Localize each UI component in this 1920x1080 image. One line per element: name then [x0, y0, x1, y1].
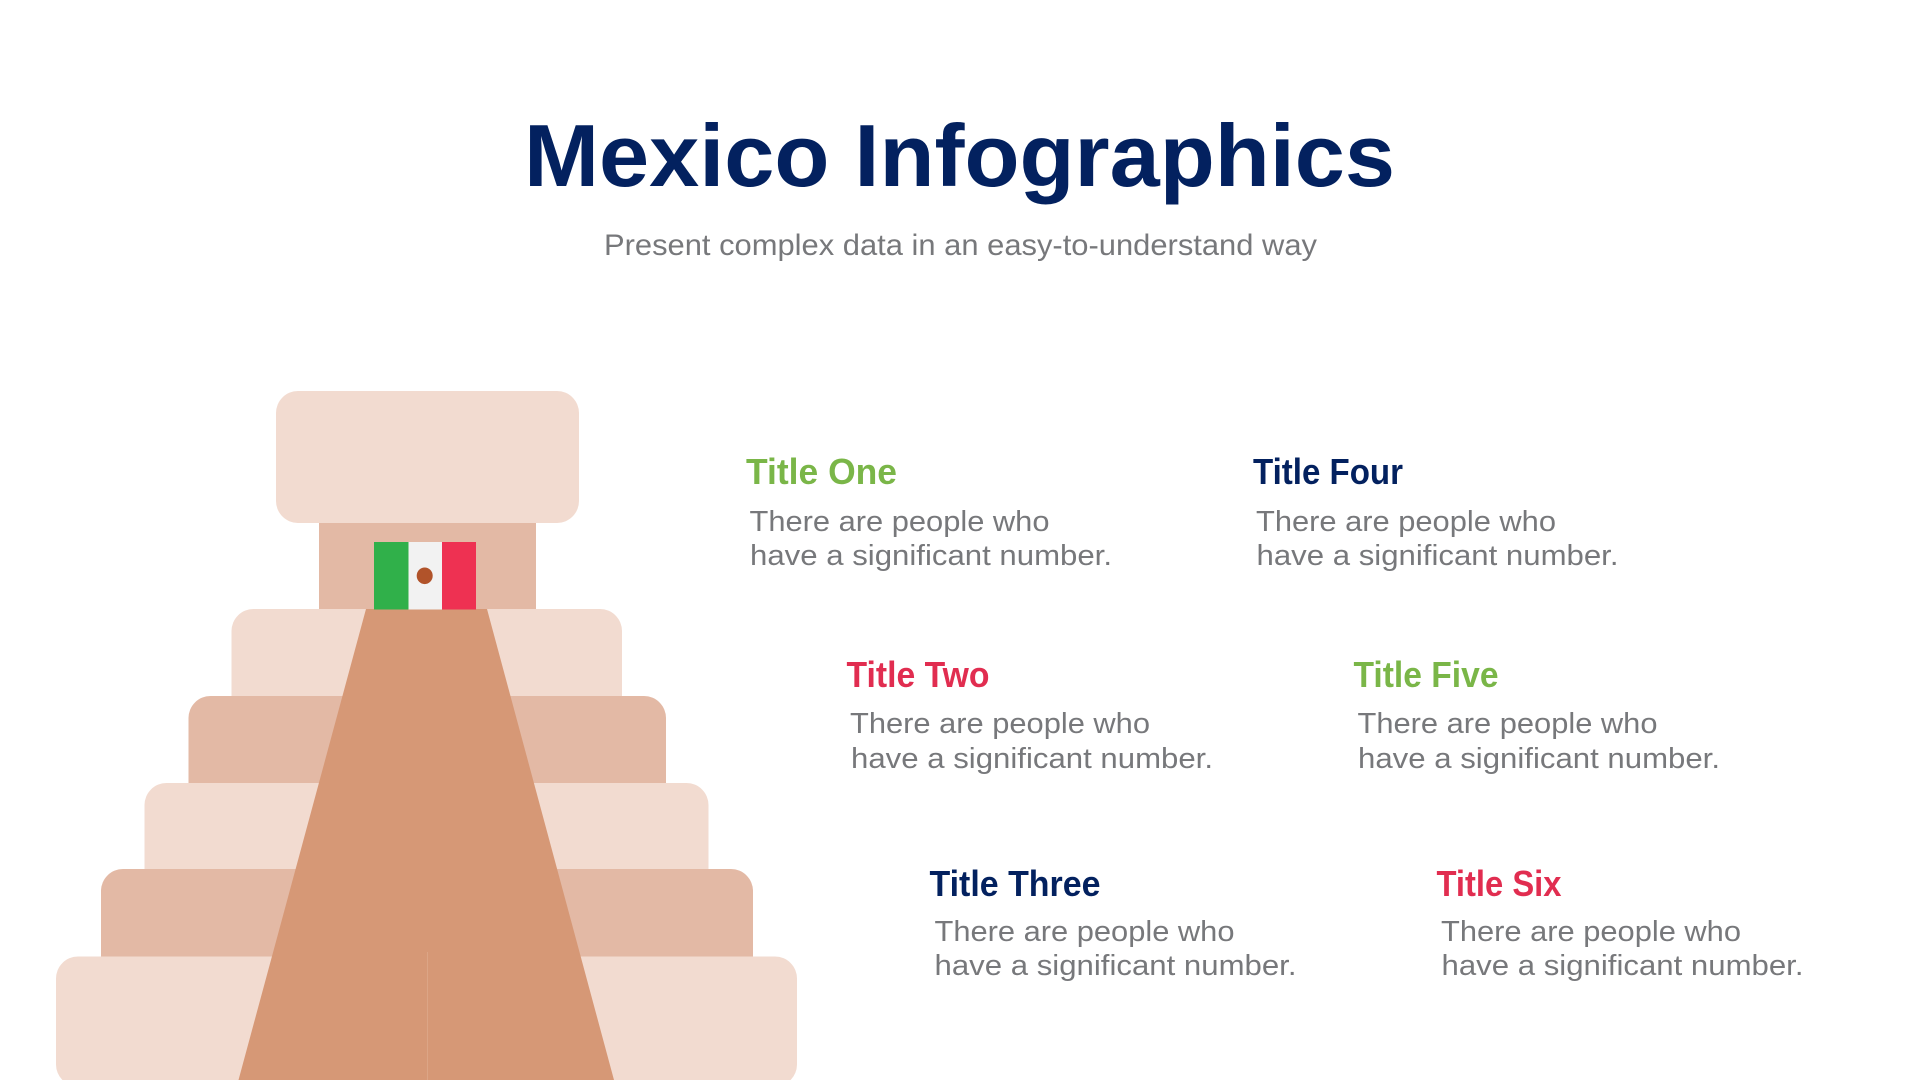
item: title four: [1253, 451, 1618, 572]
item: title one: There are people who: [750, 506, 1050, 538]
item: title three: [930, 863, 1296, 982]
item: title three: Title Three: [930, 863, 1100, 904]
item: title one: Title One: [746, 451, 897, 492]
tier three: [144, 783, 708, 869]
tier four: [101, 869, 753, 956]
Mexican flag: [374, 542, 476, 610]
item: title two: Title Two: [846, 654, 990, 695]
item: title three: have a significant number.: [934, 950, 1296, 982]
item: title six: Title Six: [1436, 863, 1562, 904]
item: title four: have a significant number.: [1256, 540, 1618, 572]
item: title three: There are people who: [934, 916, 1234, 948]
item: title two: There are people who: [850, 708, 1150, 740]
pyramid illustration: [56, 391, 797, 1080]
item: title two: [846, 654, 1213, 775]
item: title four: Title Four: [1253, 451, 1403, 492]
tier five: [56, 956, 797, 1080]
item: title two: have a significant number.: [851, 743, 1213, 775]
temple neck: [319, 523, 536, 610]
subtitle: Present complex data in an easy-to-understand way: [604, 229, 1317, 262]
item: title six: have a significant number.: [1442, 950, 1804, 982]
item: title five: There are people who: [1358, 708, 1658, 740]
item: title six: [1436, 863, 1804, 982]
central staircase: [238, 609, 614, 1080]
temple roof block: [276, 391, 579, 523]
item: title five: have a significant number.: [1358, 743, 1720, 775]
item: title one: have a significant number.: [750, 540, 1112, 572]
item: title six: There are people who: [1441, 916, 1741, 948]
title: Mexico Infographics: [524, 106, 1395, 205]
item: title one: [746, 451, 1112, 572]
tier two: [188, 696, 666, 783]
item: title four: There are people who: [1256, 506, 1556, 538]
item: title five: [1354, 654, 1720, 775]
tier one: [232, 609, 622, 696]
item: title five: Title Five: [1354, 654, 1498, 695]
